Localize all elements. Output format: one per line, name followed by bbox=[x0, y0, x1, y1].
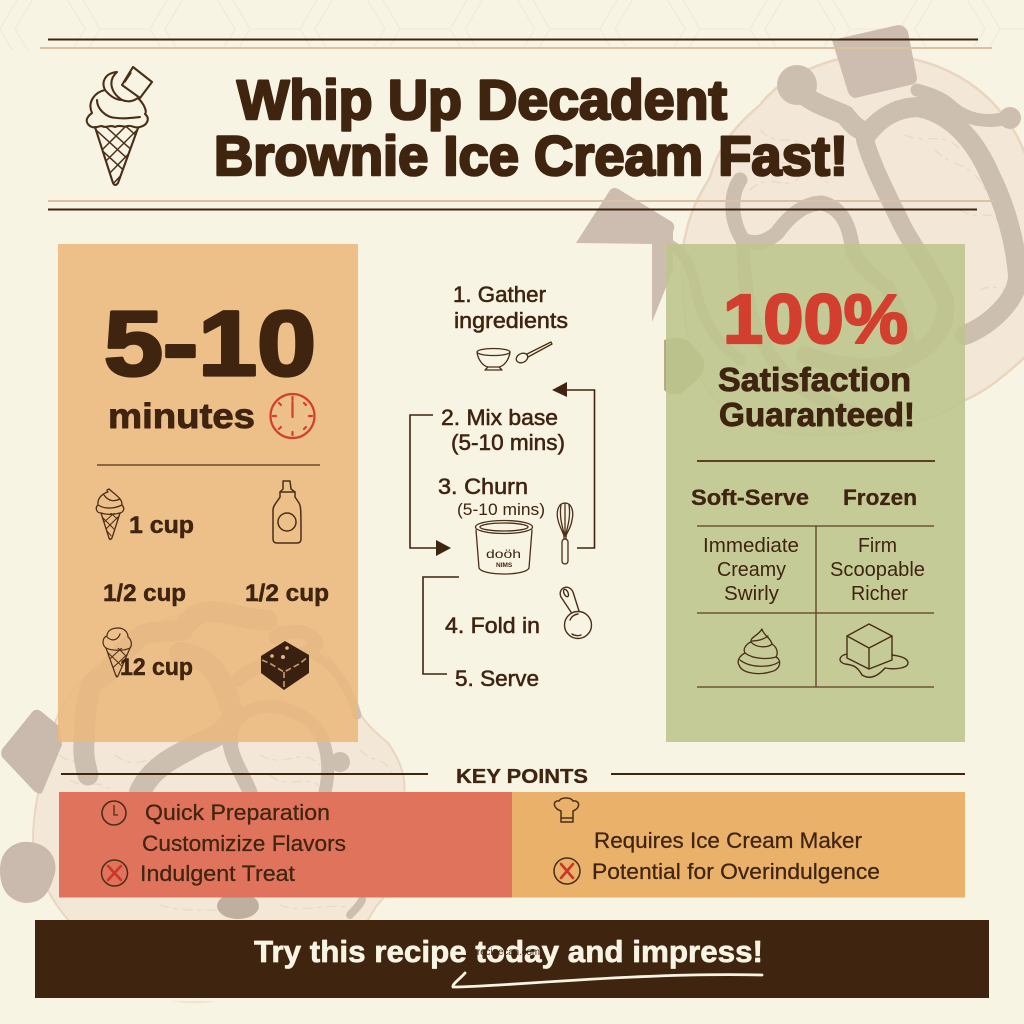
chocolate drizzle bbox=[84, 612, 267, 775]
guarantee text: Guaranteed! bbox=[719, 396, 915, 433]
arrow: churn to serve bbox=[423, 577, 459, 674]
footer banner bbox=[35, 920, 989, 998]
icon: melting cube bbox=[840, 624, 908, 677]
icon: ice cream cone with brownie bbox=[85, 67, 152, 187]
step 3 text: 3. Churn bbox=[438, 474, 528, 499]
arrow: step 5 to step 1 loop bbox=[552, 382, 594, 548]
brownie chunk bbox=[1, 710, 62, 794]
chocolate drizzle bbox=[800, 92, 1018, 335]
cons list: Requires Ice Cream Maker bbox=[594, 828, 862, 853]
icon: cross bbox=[554, 858, 580, 884]
background art: ice cream scoop top right bbox=[576, 25, 1024, 435]
amounts: 1/2 cup: 1/2 cup bbox=[103, 580, 186, 607]
comparison table: Richer bbox=[851, 583, 908, 605]
comparison table: Firm bbox=[858, 535, 897, 557]
icon: cross bbox=[102, 860, 128, 886]
icon: whisk bbox=[557, 503, 573, 564]
icon: churn tub: NIMS bbox=[496, 562, 513, 569]
comparison table: Scoopable bbox=[830, 559, 925, 581]
amount: 12 cup: 12 cup bbox=[120, 654, 193, 681]
step 3 text: (5-10 mins) bbox=[457, 501, 545, 519]
key points heading: KEY POINTS bbox=[456, 766, 588, 788]
step 1 text: 1. Gather bbox=[453, 282, 546, 307]
pros list: Quick Preparation bbox=[145, 800, 330, 825]
brownie chunk left bbox=[576, 188, 674, 322]
top rule bbox=[40, 40, 992, 48]
brownie chunk inside panel bbox=[664, 338, 704, 394]
comparison table: Soft-Serve bbox=[691, 485, 809, 510]
pros list bbox=[140, 800, 346, 886]
icon: brownie bbox=[261, 641, 309, 690]
step 1 text: ingredients bbox=[454, 308, 568, 333]
step 2 text bbox=[441, 405, 565, 455]
guarantee text: Satisfaction bbox=[718, 361, 911, 398]
icon: chef hat bbox=[554, 798, 579, 822]
icon: sauce bottle bbox=[273, 481, 301, 543]
title: Whip Up Decadent bbox=[237, 68, 727, 131]
panel: time and ingredients bbox=[58, 244, 358, 742]
amount: 1 cup: 1 cup bbox=[129, 512, 194, 539]
cons list: Potential for Overindulgence bbox=[592, 859, 880, 884]
cons list bbox=[592, 828, 880, 884]
icon: clock bbox=[102, 801, 126, 825]
comparison table: Frozen bbox=[843, 485, 917, 510]
call to action: Try this recipe today and impress! bbox=[254, 934, 763, 969]
minutes label: minutes bbox=[108, 397, 255, 436]
icon: churn tub: doöh bbox=[486, 547, 521, 561]
guarantee text bbox=[718, 361, 915, 433]
step 5 text: 5. Serve bbox=[455, 666, 539, 691]
comparison table: Swirly bbox=[724, 583, 779, 605]
panel: satisfaction comparison bbox=[666, 244, 965, 742]
icon: saucepan bbox=[560, 587, 592, 638]
pros list: Indulgent Treat bbox=[140, 861, 295, 886]
panel: steps bbox=[410, 282, 594, 691]
step 4 text: 4. Fold in bbox=[445, 613, 540, 638]
icon: soft serve cone bbox=[95, 489, 125, 542]
big number: 5-10 bbox=[104, 293, 316, 395]
icon: soft serve swirl bbox=[738, 629, 780, 674]
round chunk bbox=[0, 842, 55, 903]
title: Brownie Ice Cream Fast! bbox=[214, 124, 848, 187]
title bbox=[214, 68, 848, 187]
arrow: mix to churn bbox=[410, 415, 451, 556]
step 1 text bbox=[453, 282, 568, 333]
icon: churn tub bbox=[476, 520, 532, 574]
comparison table: Creamy bbox=[717, 559, 786, 581]
step 2 text: (5-10 mins) bbox=[451, 430, 565, 455]
icon: clock bbox=[270, 394, 314, 438]
amounts: 1/2 cup: 1/2 cup bbox=[245, 580, 329, 607]
pros list: Customizize Flavors bbox=[142, 831, 346, 856]
icon: bowl and spoon bbox=[477, 342, 552, 370]
underline swoosh bbox=[453, 973, 762, 987]
panel: cons bbox=[512, 792, 965, 898]
comparison table bbox=[691, 485, 934, 687]
panel: pros bbox=[59, 792, 512, 898]
icon: scoop cone bbox=[102, 627, 132, 678]
bottom title rule bbox=[48, 201, 995, 210]
100 percent stat: 100% bbox=[723, 280, 908, 358]
step 3 text bbox=[438, 474, 545, 519]
step 2 text: 2. Mix base bbox=[441, 405, 558, 430]
comparison table: Immediate bbox=[703, 535, 799, 557]
background art: ice cream scoop bottom left bbox=[0, 608, 405, 1004]
brownie chunk top bbox=[832, 25, 917, 98]
amounts: 1/2 cup bbox=[103, 580, 329, 607]
watermark: recipecan.com bbox=[477, 947, 540, 958]
